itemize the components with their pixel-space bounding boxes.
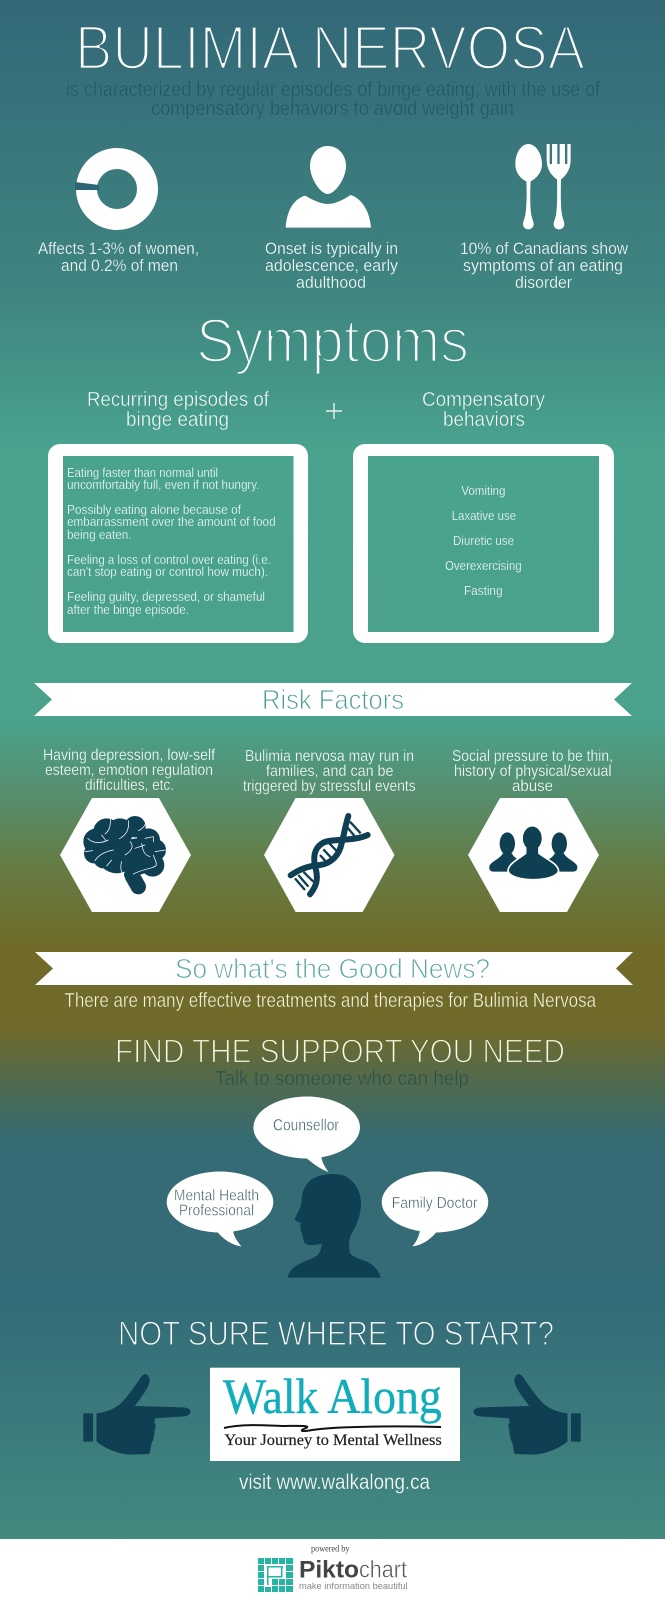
text block: behaviors list: Overexercising	[445, 558, 522, 573]
text: psychological: esteem, emotion regulation	[45, 762, 213, 779]
subtitle: compensatory behaviors to avoid weight gain	[151, 98, 514, 120]
text: prevalence	[38, 239, 199, 275]
subheading: binge eating: Recurring episodes of	[87, 389, 269, 411]
text block: behaviors list: Diuretic use	[453, 533, 514, 548]
panel: compensatory behaviors	[353, 444, 614, 643]
text: onset	[265, 239, 398, 292]
text block: behaviors list: Fasting	[464, 583, 502, 598]
text: genetic: triggered by stressful events	[243, 778, 416, 795]
heading: symptoms: Symptoms	[196, 307, 469, 376]
subtitle: is characterized by regular episodes of binge eating, with the use of	[66, 79, 600, 101]
text: genetic: families, and can be	[266, 763, 394, 780]
text: psychological	[43, 747, 215, 794]
title: BULIMIA NERVOSA	[75, 14, 586, 83]
speech bubble: mental health professional: Mental Health	[174, 1188, 259, 1205]
text block: symptoms list: Eating faster than normal until	[67, 465, 218, 480]
banner: risk factors	[34, 683, 632, 716]
panel: statistics	[38, 144, 629, 292]
speech bubble: counsellor: Counsellor	[273, 1116, 339, 1135]
subheading: compensatory behaviors: Compensatory	[422, 389, 545, 411]
text: psychological: Having depression, low-self	[43, 747, 215, 764]
text: social	[452, 748, 613, 795]
speech bubble: mental health professional: Professional	[179, 1203, 254, 1220]
logo: Walk Along: Walk Along	[223, 1368, 442, 1424]
text block: behaviors list: Vomiting	[461, 483, 505, 498]
text: Canadians: disorder	[515, 273, 572, 292]
box frame	[48, 444, 308, 643]
panel: risk factors	[43, 747, 613, 912]
text: psychological: difficulties, etc.	[85, 777, 174, 794]
icon: person	[286, 146, 371, 228]
box frame	[353, 444, 614, 643]
heading: find the support: FIND THE SUPPORT YOU NEED	[115, 1032, 565, 1070]
text: onset: adulthood	[296, 273, 366, 292]
text: prevalence: and 0.2% of men	[61, 256, 178, 275]
icon: head silhouette	[288, 1174, 381, 1278]
icon: hexagon with brain	[60, 798, 191, 912]
subtitle	[66, 79, 600, 120]
text: onset: adolescence, early	[265, 256, 398, 275]
text: website: visit www.walkalong.ca	[239, 1471, 430, 1494]
text: social: abuse	[512, 778, 553, 795]
icon: right pointing hand	[473, 1374, 581, 1455]
text: Canadians: symptoms of an eating	[463, 256, 623, 275]
icon: hexagon with DNA	[264, 798, 394, 912]
footer: Piktochart: Pikto	[299, 1556, 359, 1584]
subheading: compensatory behaviors: behaviors	[443, 409, 525, 431]
logo: Walk Along	[210, 1368, 460, 1461]
subheading: compensatory behaviors	[422, 389, 545, 431]
banner: good news: So what's the Good News?	[175, 953, 490, 984]
text: genetic	[243, 748, 416, 795]
footer: Piktochart: make information beautiful	[299, 1581, 408, 1592]
icon: left pointing hand	[83, 1374, 191, 1455]
speech bubble: counsellor	[253, 1096, 360, 1172]
banner: risk factors: Risk Factors	[262, 684, 404, 715]
heading: not sure where to start: NOT SURE WHERE TO START?	[118, 1315, 554, 1353]
subheading: binge eating: binge eating	[126, 409, 229, 431]
text: Canadians	[460, 239, 629, 292]
text: genetic: Bulimia nervosa may run in	[245, 748, 414, 765]
icon: plus	[326, 403, 342, 419]
text: social: history of physical/sexual	[454, 763, 612, 780]
icon: Piktochart logo	[258, 1558, 293, 1592]
text block: symptoms list: Possibly eating alone because of	[67, 502, 241, 517]
text: social: Social pressure to be thin,	[452, 748, 613, 765]
text block: symptoms list: embarrassment over the amount of food	[67, 514, 276, 529]
subheading: binge eating	[87, 389, 269, 431]
text block: symptoms list: can't stop eating or control how much).	[67, 564, 268, 579]
speech bubble: family doctor: Family Doctor	[392, 1195, 478, 1212]
panel: binge eating symptoms	[48, 444, 308, 643]
text block: behaviors list	[445, 483, 522, 598]
footer: Piktochart: chart	[359, 1556, 407, 1584]
text block: symptoms list: after the binge episode.	[67, 602, 189, 617]
text: prevalence: Affects 1-3% of women,	[38, 239, 199, 258]
icon: hexagon with people	[468, 798, 599, 912]
text: Canadians: 10% of Canadians show	[460, 239, 629, 258]
speech bubble: family doctor	[382, 1172, 488, 1246]
banner: good news	[35, 952, 633, 985]
footer: Piktochart: powered by	[311, 1544, 350, 1554]
text block: symptoms list: uncomfortably full, even if not hungry.	[67, 477, 260, 492]
text block: symptoms list: being eaten.	[67, 527, 132, 542]
panel: support network	[167, 1096, 488, 1278]
text block: symptoms list: Feeling a loss of control over eating (i.e.	[67, 552, 271, 567]
speech bubble: mental health professional	[167, 1172, 273, 1246]
icon: donut chart	[75, 158, 148, 220]
logo: Walk Along: Your Journey to Mental Wellness	[224, 1432, 442, 1449]
footer: Piktochart	[0, 1539, 665, 1600]
text block: symptoms list	[67, 465, 276, 617]
subheading: talk to someone: Talk to someone who can help	[215, 1068, 469, 1090]
text block: symptoms list: Feeling guilty, depressed, or shameful	[67, 589, 265, 604]
text block: behaviors list: Laxative use	[452, 508, 516, 523]
icon: spoon and fork	[515, 144, 571, 229]
text: onset: Onset is typically in	[265, 239, 398, 258]
